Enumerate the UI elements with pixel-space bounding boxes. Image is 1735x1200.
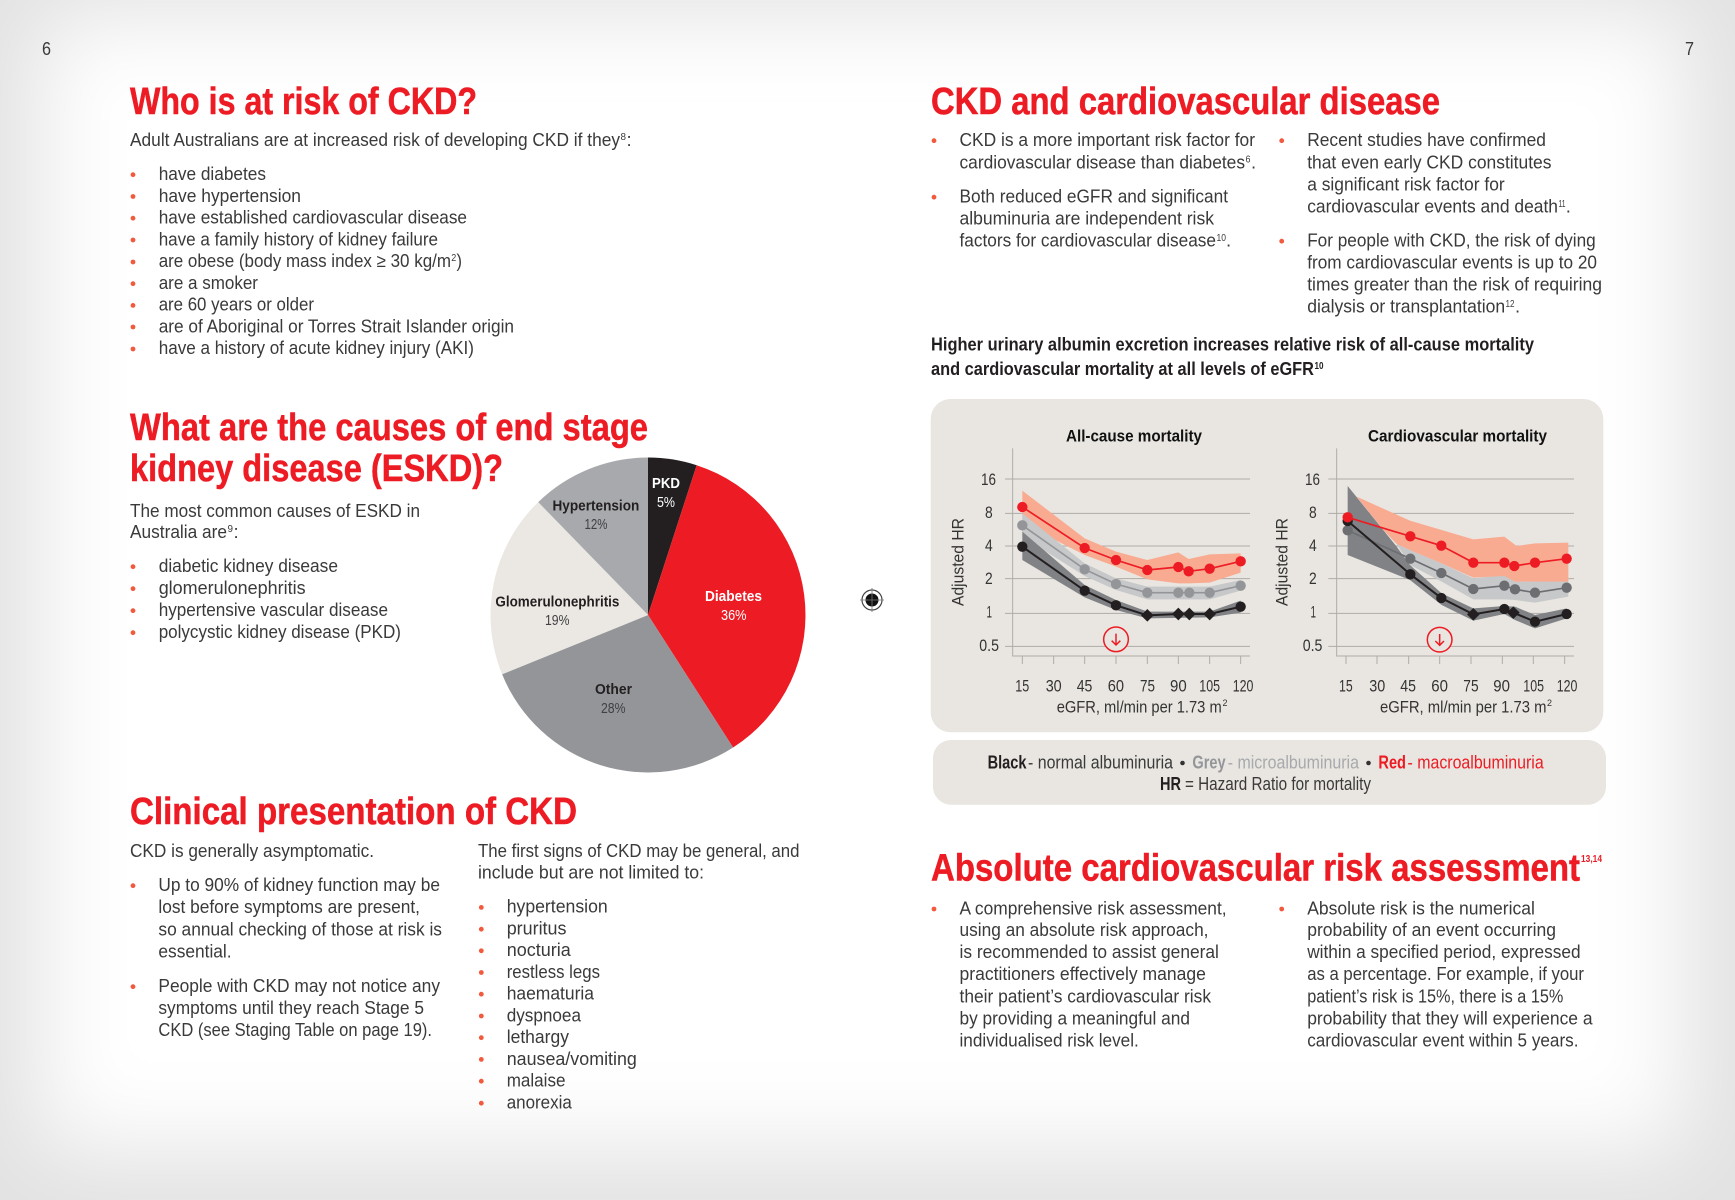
grey series <box>1342 525 1572 598</box>
chart: all-cause mortality <box>949 427 1253 716</box>
left column text: CKD is generally asymptomatic. <box>130 840 374 861</box>
left column text: essential. <box>158 940 232 962</box>
y axis labels <box>1303 470 1322 655</box>
symptoms list <box>479 896 637 1113</box>
panel: mortality charts <box>931 399 1603 732</box>
left bullet: A comprehensive risk assessment, <box>960 897 1227 918</box>
slice: Other <box>502 615 733 772</box>
y axis labels: 0.5 <box>979 636 999 655</box>
section: causes of ESKD <box>130 407 805 772</box>
left bullets: 6 <box>1246 154 1251 166</box>
slice: Other: 28% <box>601 701 626 717</box>
risk list <box>131 163 514 358</box>
slice: Other: Other <box>595 682 632 698</box>
slice: PKD: PKD <box>652 476 680 492</box>
risk list: have hypertension <box>159 185 301 206</box>
right bullets: . <box>1566 196 1571 217</box>
section: absolute cardiovascular risk assessment <box>931 848 1602 1051</box>
section: CKD and cardiovascular disease <box>931 81 1602 379</box>
left column text: Up to 90% of kidney function may be <box>158 874 440 895</box>
x axis labels: 105 <box>1523 677 1544 696</box>
left bullets: Both reduced eGFR and significant <box>960 186 1228 207</box>
chart title: All-cause mortality <box>1066 427 1202 446</box>
chart caption: and cardiovascular mortality at all levels of eGFR <box>931 359 1314 379</box>
icon: registration mark <box>860 588 884 612</box>
risk list: are of Aboriginal or Torres Strait Islander origin <box>159 315 514 336</box>
panel: legend: Black <box>988 752 1027 772</box>
x axis title: eGFR, ml/min per 1.73 m <box>1380 698 1546 716</box>
intro text: : <box>626 129 632 150</box>
symptoms list: hypertension <box>507 896 608 917</box>
y axis labels: 4 <box>1309 536 1317 555</box>
x axis title: 2 <box>1547 698 1552 709</box>
section: who is at risk <box>130 81 632 358</box>
x axis labels: 45 <box>1077 677 1092 696</box>
causes list <box>131 555 401 642</box>
right bullets: dialysis or transplantation <box>1307 296 1505 317</box>
causes list: hypertensive vascular disease <box>159 599 388 620</box>
intro text: : <box>234 521 239 542</box>
right bullet: probability that they will experience a <box>1307 1007 1593 1028</box>
y axis labels: 8 <box>1309 503 1317 522</box>
grey series band <box>1397 544 1568 603</box>
symptoms list: malaise <box>507 1070 566 1091</box>
slice: Glomerulonephritis: Glomerulonephritis <box>495 595 619 611</box>
left bullet: their patient’s cardiovascular risk <box>960 985 1212 1006</box>
heading: What are the causes of end stage <box>130 407 648 449</box>
left bullet: is recommended to assist general <box>960 941 1219 962</box>
left column text: symptoms until they reach Stage 5 <box>158 997 424 1018</box>
pie chart <box>491 457 805 772</box>
slice: Diabetes: Diabetes <box>705 589 762 605</box>
left bullets: CKD is a more important risk factor for <box>960 129 1255 150</box>
risk list: have a history of acute kidney injury (AKI) <box>159 337 474 358</box>
symptoms list: lethargy <box>507 1026 570 1047</box>
chart title: Cardiovascular mortality <box>1368 427 1547 446</box>
symptoms list: restless legs <box>507 961 600 982</box>
intro text: 8 <box>620 132 626 143</box>
black series <box>1017 541 1246 622</box>
slice: Hypertension: 12% <box>584 517 608 533</box>
x axis labels: 75 <box>1140 677 1155 696</box>
right bullets: 12 <box>1506 299 1515 310</box>
left bullets: . <box>1251 151 1256 172</box>
x axis labels: 15 <box>1015 677 1029 696</box>
icon: down arrow in circle <box>1104 627 1128 652</box>
x axis title: eGFR, ml/min per 1.73 m <box>1057 698 1222 716</box>
symptoms list: haematuria <box>507 982 595 1004</box>
x axis labels: 75 <box>1463 677 1479 696</box>
page number 6: 6 <box>42 38 51 59</box>
x axis labels: 60 <box>1108 677 1124 696</box>
causes list: glomerulonephritis <box>159 577 306 598</box>
intro text <box>130 500 420 542</box>
left bullets: factors for cardiovascular disease <box>960 230 1216 251</box>
heading: 13,14 <box>1581 854 1602 865</box>
right column intro <box>478 840 800 883</box>
icon: down arrow in circle <box>1427 627 1452 652</box>
symptoms list: dyspnoea <box>507 1004 582 1025</box>
intro text: Adult Australians are at increased risk of developing CKD if they <box>130 129 621 150</box>
slice: PKD: 5% <box>657 495 675 511</box>
heading: Who is at risk of CKD? <box>130 81 477 123</box>
page number 7: 7 <box>1685 38 1694 59</box>
right bullets: Recent studies have confirmed <box>1307 129 1546 150</box>
y axis labels: 2 <box>1309 569 1317 588</box>
slice: PKD <box>648 457 697 615</box>
left bullets: albuminuria are independent risk <box>960 208 1215 229</box>
x axis labels: 120 <box>1557 677 1577 696</box>
risk list: are 60 years or older <box>159 294 314 315</box>
black series band <box>1348 486 1567 628</box>
symptoms list: anorexia <box>507 1092 572 1113</box>
heading: CKD and cardiovascular disease <box>931 81 1440 123</box>
y axis labels: 16 <box>1305 470 1320 489</box>
x axis labels: 90 <box>1493 677 1510 696</box>
right column intro: include but are not limited to: <box>478 862 704 883</box>
left bullet: by providing a meaningful and <box>960 1007 1190 1028</box>
right bullet: as a percentage. For example, if your <box>1307 963 1584 984</box>
panel: legend: = Hazard Ratio for mortality <box>1185 773 1372 794</box>
red series band <box>1357 497 1568 582</box>
y axis labels: 1 <box>986 603 992 622</box>
plot area <box>1005 448 1250 664</box>
black series band <box>1022 532 1241 618</box>
heading: Absolute cardiovascular risk assessment <box>931 848 1580 890</box>
y axis labels: 8 <box>985 503 993 522</box>
chart caption: Higher urinary albumin excretion increases relative risk of all-cause mortality <box>931 335 1534 355</box>
risk list: have a family history of kidney failure <box>159 228 438 249</box>
symptoms list: nausea/vomiting <box>507 1048 637 1069</box>
right column intro: The first signs of CKD may be general, and <box>478 840 800 861</box>
y axis title: Adjusted HR <box>949 518 967 606</box>
intro text: 9 <box>228 524 233 535</box>
section: clinical presentation <box>130 791 800 1113</box>
symptoms list: pruritus <box>507 918 566 939</box>
panel: legend: - normal albuminuria <box>1028 751 1174 772</box>
x axis labels: 30 <box>1046 677 1062 696</box>
risk list: 2 <box>451 253 457 264</box>
symptoms list: nocturia <box>507 939 571 960</box>
right bullets: For people with CKD, the risk of dying <box>1307 230 1596 251</box>
chart caption <box>931 335 1534 379</box>
panel: legend: - microalbuminuria <box>1228 752 1360 772</box>
slice: Hypertension: Hypertension <box>552 499 639 515</box>
slice: Glomerulonephritis <box>491 502 648 674</box>
slice: Diabetes: 36% <box>721 608 747 624</box>
heading: Clinical presentation of CKD <box>130 791 577 833</box>
chart: cardiovascular mortality <box>1273 427 1577 716</box>
x axis title: 2 <box>1222 698 1228 709</box>
heading <box>130 407 648 490</box>
red series <box>1342 512 1572 571</box>
right bullet: patient’s risk is 15%, there is a 15% <box>1307 985 1563 1006</box>
heading: kidney disease (ESKD)? <box>130 448 503 490</box>
left column text: People with CKD may not notice any <box>158 975 441 996</box>
risk list: are a smoker <box>159 272 258 293</box>
left bullet: individualised risk level. <box>960 1030 1139 1051</box>
left bullet: practitioners effectively manage <box>960 963 1206 984</box>
panel: legend: Grey <box>1192 752 1226 772</box>
x axis labels: 45 <box>1400 677 1416 696</box>
causes list: diabetic kidney disease <box>159 555 338 576</box>
left column text: so annual checking of those at risk is <box>158 918 442 940</box>
plot area <box>1328 448 1574 664</box>
x axis labels: 15 <box>1339 677 1353 696</box>
slice: Glomerulonephritis: 19% <box>545 613 570 629</box>
y axis labels: 1 <box>1310 603 1316 622</box>
left column text: CKD (see Staging Table on page 19). <box>158 1019 432 1040</box>
left bullet <box>932 897 1227 1051</box>
panel: legend <box>933 740 1606 805</box>
y axis title: Adjusted HR <box>1273 518 1291 606</box>
risk list: have diabetes <box>159 163 266 184</box>
right bullets: 11 <box>1558 199 1566 210</box>
y axis labels: 4 <box>985 536 993 555</box>
x axis labels: 30 <box>1369 677 1385 696</box>
left bullets <box>932 129 1256 251</box>
right bullets: a significant risk factor for <box>1307 174 1505 194</box>
panel: legend: - macroalbuminuria <box>1408 752 1545 772</box>
y axis labels <box>979 470 999 655</box>
grey series band <box>1022 513 1241 599</box>
right bullet <box>1279 897 1593 1051</box>
y axis labels: 2 <box>985 569 993 588</box>
left bullets: 10 <box>1216 233 1226 244</box>
right bullet: within a specified period, expressed <box>1306 941 1581 962</box>
y axis labels: 16 <box>981 470 996 489</box>
right bullet: Absolute risk is the numerical <box>1307 897 1535 918</box>
slice: Hypertension <box>538 458 648 615</box>
x axis labels: 120 <box>1233 677 1253 696</box>
intro text: The most common causes of ESKD in <box>130 500 420 521</box>
right bullet: probability of an event occurring <box>1307 919 1556 940</box>
red series band <box>1022 491 1241 583</box>
risk list: are obese (body mass index ≥ 30 kg/m <box>159 250 451 271</box>
left column text <box>130 840 442 1040</box>
x axis labels <box>1339 677 1577 696</box>
right bullets <box>1279 129 1602 317</box>
left bullets: cardiovascular disease than diabetes <box>960 151 1245 172</box>
grey series <box>1017 520 1246 598</box>
chart caption: 10 <box>1314 361 1324 372</box>
right bullets: that even early CKD constitutes <box>1307 151 1552 172</box>
x axis labels: 60 <box>1431 677 1448 696</box>
red series <box>1017 502 1246 576</box>
panel: legend: Red <box>1378 752 1406 772</box>
causes list: polycystic kidney disease (PKD) <box>159 621 401 642</box>
right bullets: . <box>1515 296 1520 317</box>
slice: Diabetes <box>648 465 805 748</box>
left bullet: using an absolute risk approach, <box>960 919 1208 940</box>
left column text: lost before symptoms are present, <box>158 896 420 917</box>
x axis labels <box>1015 677 1253 696</box>
x axis labels: 90 <box>1170 677 1187 696</box>
intro text: Australia are <box>130 521 227 542</box>
right bullets: cardiovascular events and death <box>1307 196 1558 217</box>
black series <box>1342 516 1572 627</box>
left bullets: . <box>1226 230 1231 251</box>
y axis labels: 0.5 <box>1303 636 1322 655</box>
right bullet: cardiovascular event within 5 years. <box>1307 1030 1578 1051</box>
risk list: have established cardiovascular disease <box>159 206 467 228</box>
risk list: ) <box>456 250 462 271</box>
right bullets: from cardiovascular events is up to 20 <box>1307 252 1597 273</box>
panel: legend: HR <box>1160 774 1181 794</box>
right bullets: times greater than the risk of requiring <box>1307 274 1602 295</box>
x axis labels: 105 <box>1199 677 1220 696</box>
